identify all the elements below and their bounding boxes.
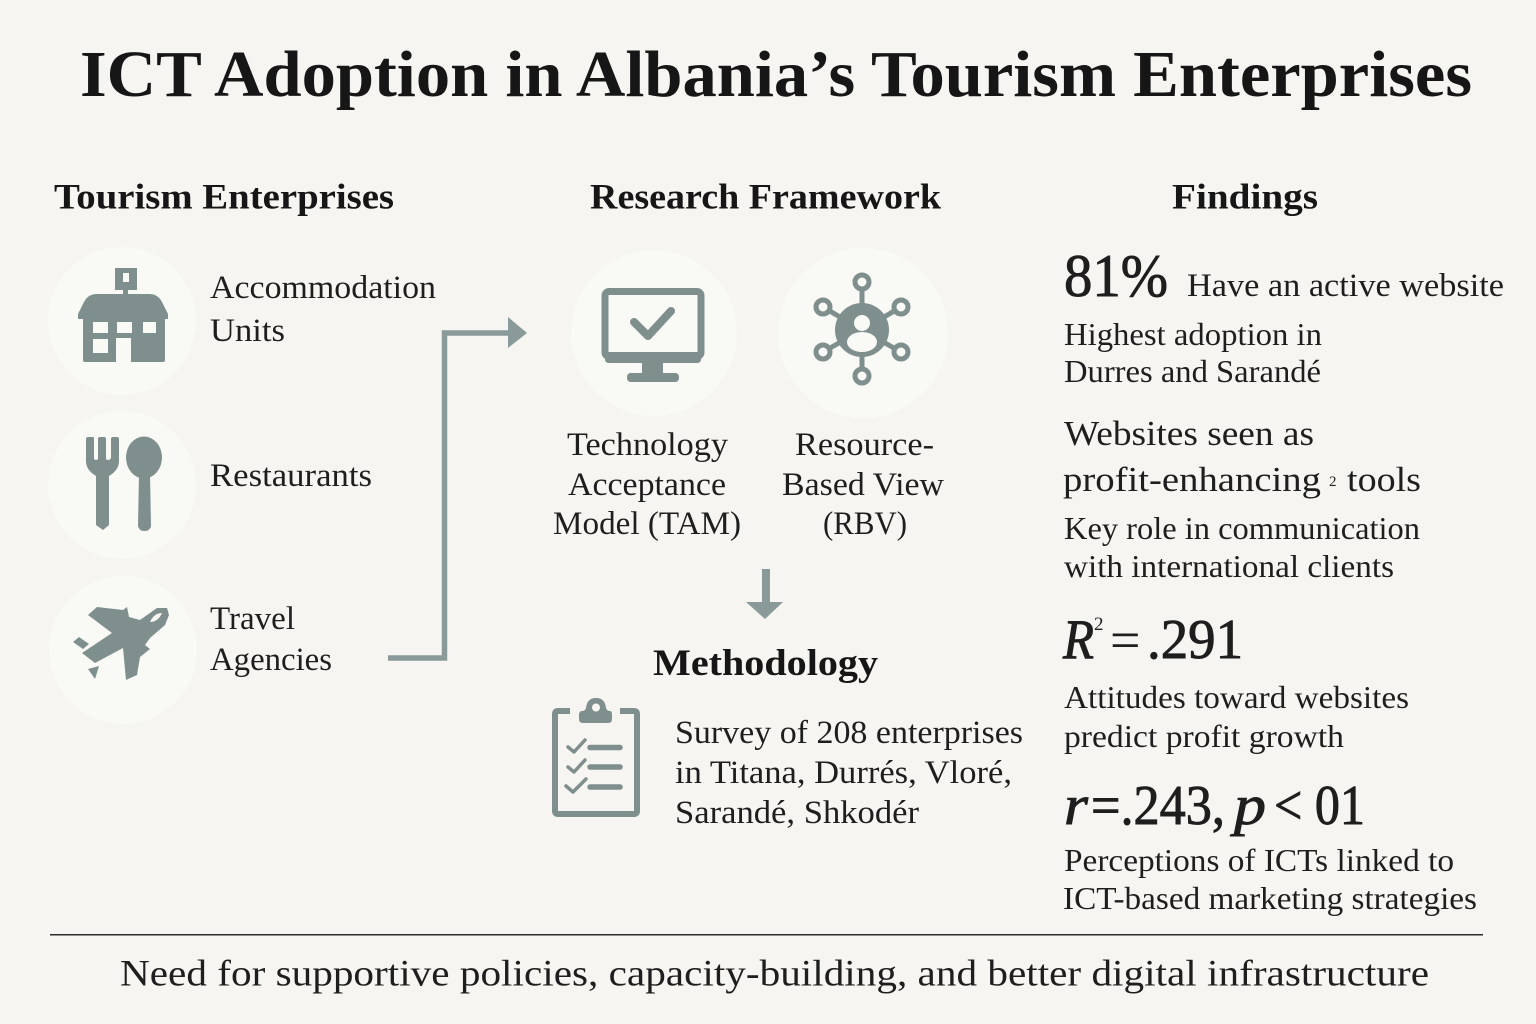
- label: restaurants: Restaurants: [210, 458, 372, 494]
- stat: R squared: =: [1110, 610, 1140, 670]
- icon: fork and spoon: [48, 411, 196, 559]
- label: accommodation units: [210, 270, 436, 349]
- text: highest adoption: [1064, 317, 1322, 389]
- text: perceptions linked: [1063, 843, 1477, 916]
- text: survey description: Survey of 208 enterprises: [675, 715, 1023, 751]
- heading: methodology: Methodology: [653, 643, 879, 684]
- text: perceptions linked: ICT-based marketing strategies: [1063, 881, 1477, 916]
- text: have an active website: Have an active website: [1187, 268, 1504, 304]
- text: profit-enhancing tools: 2: [1329, 474, 1336, 490]
- text: perceptions linked: Perceptions of ICTs linked to: [1064, 843, 1454, 878]
- panel: findings: [1062, 176, 1504, 916]
- title: ICT Adoption in Albania’s Tourism Enterprises: [80, 38, 1472, 111]
- label: resource-based view: Resource-: [795, 427, 934, 463]
- label: travel agencies: Travel: [210, 601, 295, 637]
- stat: 81 percent: 81%: [1064, 243, 1168, 309]
- stat: correlation: p: [1229, 775, 1266, 837]
- label: travel agencies: Agencies: [210, 642, 332, 678]
- heading: research framework: Research Framework: [590, 176, 941, 216]
- text: communication role: Key role in communication: [1064, 511, 1420, 546]
- label: resource-based view: Based View: [782, 467, 944, 503]
- arrow: framework to methodology: [746, 569, 783, 619]
- text: communication role: [1064, 511, 1420, 584]
- stat: R squared: 2: [1094, 614, 1104, 635]
- panel: tourism enterprises: [48, 176, 436, 724]
- text: highest adoption: Highest adoption in: [1064, 317, 1322, 352]
- label: technology acceptance model: Acceptance: [568, 467, 726, 503]
- label: technology acceptance model: Technology: [567, 427, 729, 463]
- text: profit-enhancing tools: profit-enhancing: [1063, 460, 1321, 499]
- label: resource-based view: (RBV): [823, 506, 907, 542]
- text: highest adoption: Durres and Sarandé: [1064, 354, 1321, 389]
- stat: correlation: < 01: [1274, 775, 1365, 837]
- label: resource-based view: [782, 427, 944, 542]
- footer conclusion: Need for supportive policies, capacity-building, and better digital infrastructure: [120, 954, 1429, 994]
- text: communication role: with international clients: [1064, 549, 1394, 584]
- icon: accommodation building: [48, 247, 196, 395]
- label: technology acceptance model: [553, 427, 741, 542]
- label: accommodation units: Units: [210, 313, 285, 349]
- stat: R squared: [1062, 609, 1243, 671]
- icon: airplane: [49, 576, 197, 724]
- icon: survey clipboard: [555, 698, 637, 814]
- heading: tourism enterprises: Tourism Enterprises: [54, 176, 394, 216]
- text: profit-enhancing tools: tools: [1347, 460, 1421, 499]
- label: travel agencies: [210, 601, 332, 678]
- label: accommodation units: Accommodation: [210, 270, 436, 306]
- icon: monitor with check: [571, 250, 737, 416]
- icon: resource network: [778, 248, 948, 418]
- text: attitudes predict profit: [1064, 680, 1409, 754]
- text: survey description: Sarandé, Shkodér: [675, 795, 919, 831]
- stat: correlation: [1064, 775, 1365, 837]
- stat: R squared: R: [1062, 609, 1094, 671]
- stat: correlation: =.243,: [1091, 775, 1225, 837]
- heading: findings: Findings: [1172, 176, 1318, 216]
- arrow: enterprises to framework: [388, 317, 527, 658]
- label: technology acceptance model: Model (TAM): [553, 506, 741, 542]
- text: profit-enhancing tools: [1063, 414, 1421, 499]
- text: attitudes predict profit: Attitudes toward websites: [1064, 680, 1409, 715]
- stat: R squared: .291: [1147, 609, 1243, 671]
- stat: correlation: r: [1064, 775, 1088, 837]
- panel: research framework: [553, 176, 1023, 831]
- text: survey description: [675, 715, 1023, 831]
- text: attitudes predict profit: predict profit growth: [1064, 719, 1344, 754]
- text: survey description: in Titana, Durrés, Vloré,: [675, 755, 1012, 791]
- text: profit-enhancing tools: Websites seen as: [1064, 414, 1314, 453]
